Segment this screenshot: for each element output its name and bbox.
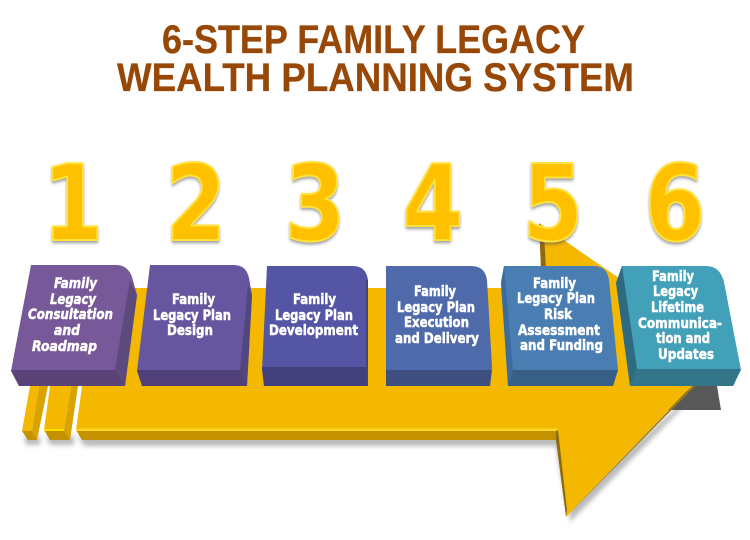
number 6: 6 bbox=[645, 142, 705, 265]
step 1 box bbox=[11, 265, 137, 386]
number 3: 3 bbox=[285, 142, 345, 265]
step 4 label: Legacy Plan bbox=[397, 300, 475, 316]
step 5 label: Legacy Plan bbox=[517, 291, 595, 307]
step 6 label: Family bbox=[652, 269, 694, 285]
step 4 box bbox=[386, 266, 492, 386]
arrow soft shadow bbox=[24, 396, 694, 522]
arrow top face bbox=[76, 223, 725, 517]
step 6 label: Updates bbox=[658, 347, 714, 363]
left bar two bbox=[44, 386, 78, 440]
step 6 label: tion and bbox=[656, 331, 710, 347]
step 2 box bbox=[137, 265, 252, 386]
step 2 label: Legacy Plan bbox=[153, 308, 231, 324]
number 5: 5 bbox=[523, 142, 583, 265]
step 6 label bbox=[638, 269, 722, 363]
step 3 label: Legacy Plan bbox=[275, 308, 353, 324]
title bbox=[117, 18, 634, 100]
step 1 label: Legacy bbox=[50, 292, 96, 308]
step 5 label bbox=[517, 276, 603, 354]
arrowhead lower right edge bbox=[566, 386, 695, 517]
step 5 label: Risk bbox=[544, 307, 572, 323]
step 5 label: and Funding bbox=[520, 338, 603, 354]
step 6 label: Lifetime bbox=[651, 300, 704, 316]
step 4 label: and Delivery bbox=[395, 331, 479, 347]
step 3 label: Development bbox=[269, 323, 358, 339]
step 3 label bbox=[269, 292, 358, 339]
step 2 label: Family bbox=[172, 292, 215, 308]
number 2: 2 bbox=[166, 142, 226, 265]
step 5 box bbox=[501, 266, 618, 386]
step 4 label: Execution bbox=[404, 315, 469, 331]
step 6 label: Legacy bbox=[653, 284, 698, 300]
step 1 label: and bbox=[54, 323, 81, 339]
step 5 label: Assessment bbox=[518, 323, 600, 339]
arrow bottom bevel bbox=[76, 430, 556, 440]
step 1 label: Roadmap bbox=[32, 339, 97, 355]
arrow graphic bbox=[22, 223, 725, 522]
arrow cast shadow on the right bbox=[667, 386, 721, 410]
step 6 box bbox=[616, 266, 741, 386]
step 3 box bbox=[262, 266, 368, 386]
arrowhead top-back bevel bbox=[539, 223, 546, 288]
step 2 label: Design bbox=[167, 323, 213, 339]
step 2 label bbox=[153, 292, 231, 339]
step 4 label: Family bbox=[414, 284, 456, 300]
title: 6-STEP FAMILY LEGACY bbox=[162, 18, 585, 62]
left bar one bbox=[22, 386, 48, 440]
step 1 label: Family bbox=[54, 276, 97, 292]
number 4: 4 bbox=[403, 142, 463, 265]
step 1 label: Consultation bbox=[28, 307, 113, 323]
step 1 label bbox=[28, 276, 113, 355]
step 5 label: Family bbox=[533, 276, 576, 292]
title: WEALTH PLANNING SYSTEM bbox=[117, 56, 634, 100]
number 1: 1 bbox=[43, 142, 103, 265]
arrowhead inner bevel bbox=[556, 430, 567, 517]
step 6 label: Communica- bbox=[638, 316, 722, 332]
step 3 label: Family bbox=[293, 292, 336, 308]
step 4 label bbox=[395, 284, 479, 347]
